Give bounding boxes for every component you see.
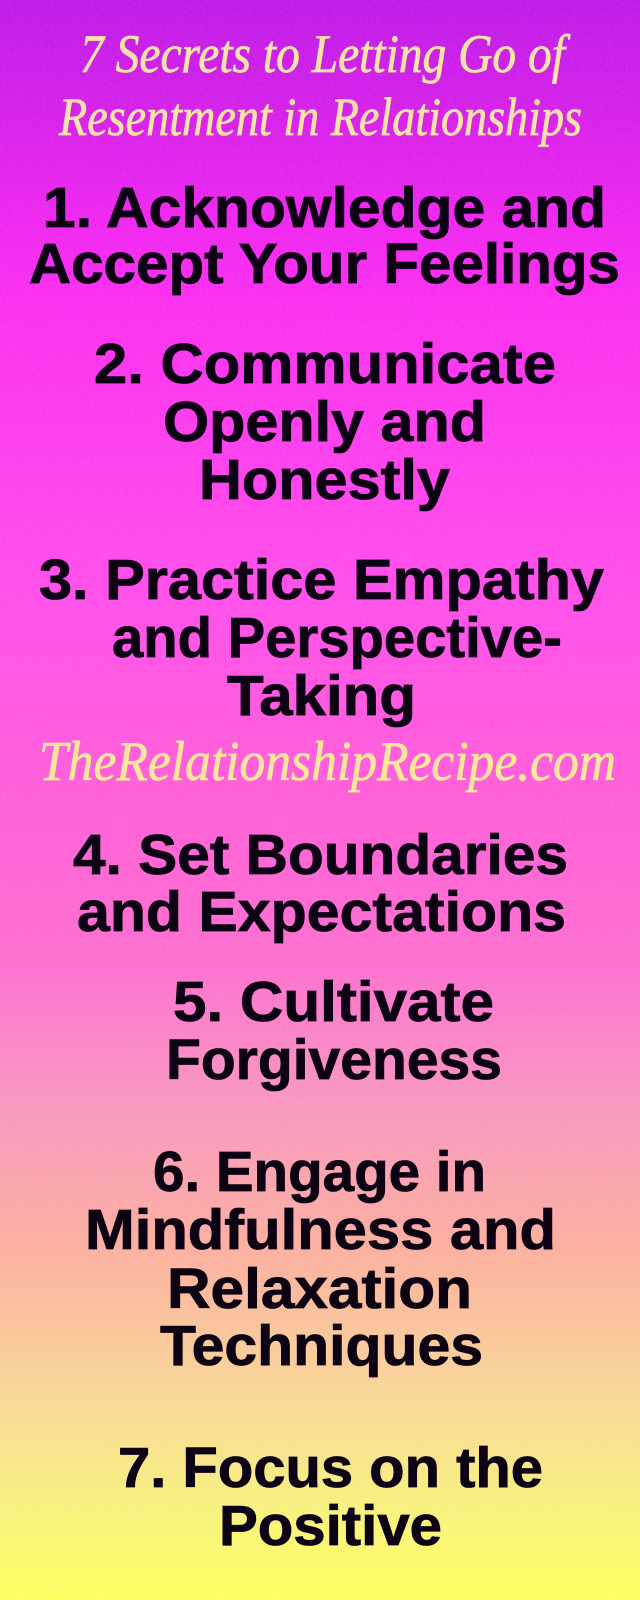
heading: secret 3 (39, 548, 604, 728)
heading: secret 4 (73, 823, 568, 944)
heading: secret 5: Forgiveness (166, 1028, 502, 1092)
heading: secret 2: Openly and (163, 390, 486, 454)
heading: secret 3: 3. Practice Empathy (39, 548, 604, 612)
heading: secret 3: Taking (227, 664, 416, 728)
title: 7 Secrets to Letting Go of (80, 24, 571, 84)
heading: secret 6: Relaxation (167, 1257, 472, 1321)
heading: secret 2 (94, 332, 556, 512)
heading: secret 1 (29, 176, 620, 296)
heading: secret 2: 2. Communicate (94, 332, 556, 396)
heading: secret 4: and Expectations (77, 880, 566, 944)
heading: secret 4: 4. Set Boundaries (73, 823, 568, 887)
heading: secret 1: Accept Your Feelings (29, 232, 620, 296)
heading: secret 6 (85, 1140, 556, 1378)
heading: secret 5: 5. Cultivate (173, 970, 494, 1034)
heading: secret 2: Honestly (199, 448, 450, 512)
heading: secret 5 (166, 970, 502, 1092)
heading: secret 6: 6. Engage in (153, 1140, 486, 1204)
heading: secret 7 (118, 1436, 543, 1558)
heading: secret 6: Techniques (160, 1314, 483, 1378)
heading: secret 7: Positive (219, 1494, 442, 1558)
heading: secret 1: 1. Acknowledge and (43, 176, 606, 240)
heading: secret 6: Mindfulness and (85, 1198, 556, 1262)
heading: secret 3: and Perspective- (112, 606, 562, 670)
title (58, 24, 582, 147)
heading: secret 7: 7. Focus on the (118, 1436, 543, 1500)
